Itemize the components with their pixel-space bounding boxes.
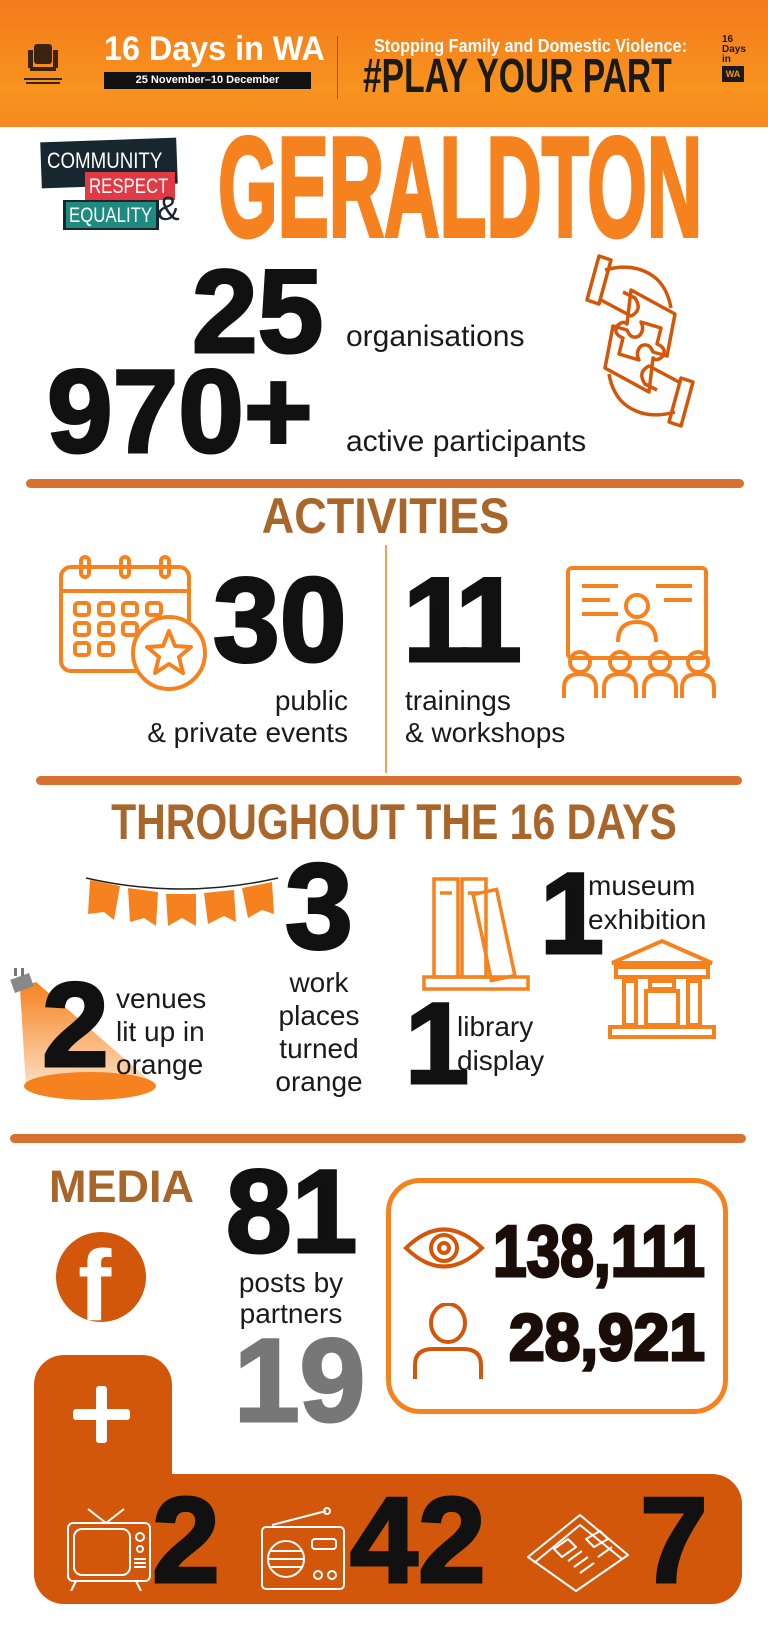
- stat: print: 7: [640, 1472, 708, 1608]
- icon: newspaper: [527, 1514, 629, 1592]
- icon: museum building: [608, 938, 716, 1039]
- icon: puzzle hands: [585, 254, 695, 428]
- stat: tv: 2: [152, 1472, 220, 1608]
- stat: library: 1: [405, 980, 469, 1108]
- text: posts by: [239, 1267, 343, 1298]
- stat: venues: 2: [42, 958, 109, 1092]
- text: exhibition: [588, 904, 706, 935]
- text: partners: [240, 1298, 342, 1329]
- text: & private events: [147, 717, 348, 748]
- stat: views: 138,111: [493, 1212, 705, 1292]
- text: & workshops: [405, 717, 565, 748]
- divider: [10, 1134, 746, 1143]
- icon: bunting: [86, 877, 278, 926]
- text: active participants: [346, 425, 586, 458]
- stat: museum: 1: [540, 850, 604, 978]
- icon: calendar: [59, 555, 207, 691]
- text: library: [457, 1011, 533, 1042]
- text: venues: [116, 983, 206, 1014]
- date bar: 25 November–10 December: [136, 74, 279, 86]
- text: orange: [275, 1066, 363, 1097]
- text: turned: [279, 1033, 359, 1064]
- icon: 16 days mark: WA: [726, 69, 740, 79]
- icon: radio: [261, 1507, 345, 1590]
- text: lit up in: [116, 1016, 205, 1047]
- divider: [36, 776, 742, 785]
- header title: 16 Days in WA: [104, 30, 325, 68]
- stat: workplaces: 3: [285, 838, 353, 974]
- heading: media: MEDIA: [49, 1161, 194, 1212]
- icon: eye: [403, 1227, 485, 1269]
- heading: throughout the 16 days: THROUGHOUT THE 16 DAYS: [111, 794, 677, 850]
- header banner: [0, 0, 768, 127]
- icon: books: [422, 877, 530, 991]
- icon: 16 days mark: 16 Days in: [722, 34, 746, 65]
- logo: community respect equality: EQUALITY: [69, 204, 152, 227]
- stat: radio: 42: [350, 1472, 486, 1608]
- logo: community respect equality: &: [157, 190, 180, 228]
- icon: plus: [73, 1386, 130, 1443]
- text: orange: [116, 1049, 203, 1080]
- divider: [26, 479, 744, 488]
- icon: training presentation: [562, 566, 716, 698]
- panel: reach: [386, 1178, 728, 1414]
- slogan: #PLAY YOUR PART: [363, 50, 672, 103]
- logo: community respect equality: COMMUNITY: [47, 148, 162, 173]
- stat: organisations: 25: [192, 246, 323, 378]
- stat: posts: 81: [226, 1146, 357, 1278]
- heading: activities: ACTIVITIES: [262, 488, 510, 544]
- text: trainings: [405, 685, 511, 716]
- stat: trainings: 11: [403, 553, 514, 687]
- icon: person: [413, 1303, 483, 1379]
- logo: community respect equality: RESPECT: [89, 175, 168, 198]
- stat: participants: 970+: [47, 346, 313, 478]
- text: 19: [234, 1315, 365, 1447]
- icon: spotlight: [10, 968, 156, 1100]
- icon: facebook: [56, 1232, 146, 1322]
- icon: 16 days mark: [722, 34, 746, 82]
- stat: reach: 28,921: [509, 1300, 705, 1374]
- text: public: [275, 685, 348, 716]
- slogan subtitle: Stopping Family and Domestic Violence:: [374, 36, 687, 56]
- text: places: [279, 1000, 359, 1031]
- panel: other media: [34, 1355, 742, 1608]
- text: display: [457, 1045, 544, 1076]
- stat: events: 30: [213, 553, 346, 687]
- text: museum: [588, 870, 695, 901]
- logo: community respect equality: [40, 138, 180, 230]
- text: work: [289, 967, 349, 998]
- icon: tv: [67, 1508, 151, 1591]
- text: organisations: [346, 320, 524, 353]
- icon: government crest: [24, 44, 62, 84]
- date bar: [104, 72, 311, 89]
- title: Geraldton: GERALDTON: [218, 108, 702, 267]
